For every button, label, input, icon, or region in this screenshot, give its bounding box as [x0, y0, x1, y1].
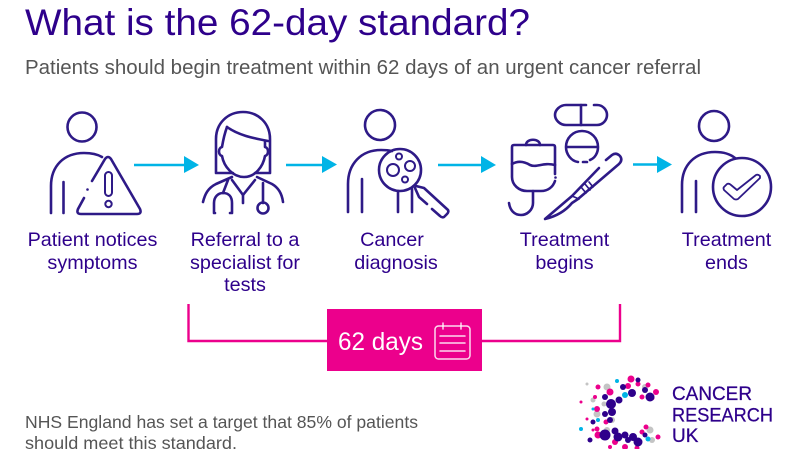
label: cancer diagnosis: diagnosis: [354, 252, 438, 274]
icon: treatment drip, pills and scalpel: [509, 105, 621, 219]
logo wordmark: UK: [672, 426, 699, 447]
logo wordmark: RESEARCH: [672, 406, 773, 426]
label: patient notices symptoms: Patient notices: [28, 229, 157, 251]
arrow 4: [633, 156, 672, 173]
arrow 1: [134, 156, 199, 173]
label: treatment ends: ends: [705, 252, 748, 274]
icon: person with check mark: [682, 111, 771, 216]
label: cancer diagnosis: Cancer: [360, 229, 424, 251]
label: treatment begins: begins: [535, 252, 594, 274]
label: patient notices symptoms: symptoms: [47, 252, 138, 274]
label: referral to a specialist for tests: specialist for: [190, 252, 300, 274]
logo wordmark: CANCER: [672, 384, 752, 405]
label: referral to a specialist for tests: Referral to a: [191, 229, 299, 251]
logo mark: dotted C: [579, 376, 660, 449]
footnote: NHS England has set a target that 85% of patients: [25, 412, 418, 432]
bracket: 62-day span: [188, 304, 620, 341]
icon: doctor with stethoscope: [203, 112, 283, 214]
callout: 62 days: [327, 309, 482, 371]
title: What is the 62-day standard?: [25, 2, 530, 43]
icon: patient with warning triangle: [51, 112, 141, 214]
label: treatment ends: Treatment: [682, 229, 772, 251]
callout: 62 days: 62 days: [338, 328, 423, 356]
arrow 2: [286, 156, 337, 173]
label: treatment begins: Treatment: [520, 229, 610, 251]
subtitle: Patients should begin treatment within 62 days of an urgent cancer referral: [25, 57, 701, 79]
label: referral to a specialist for tests: tests: [224, 274, 266, 296]
icon: calendar: [435, 323, 470, 359]
icon: person with magnifying glass: [348, 110, 448, 217]
arrow 3: [438, 156, 496, 173]
logo: Cancer Research UK: [579, 376, 773, 449]
